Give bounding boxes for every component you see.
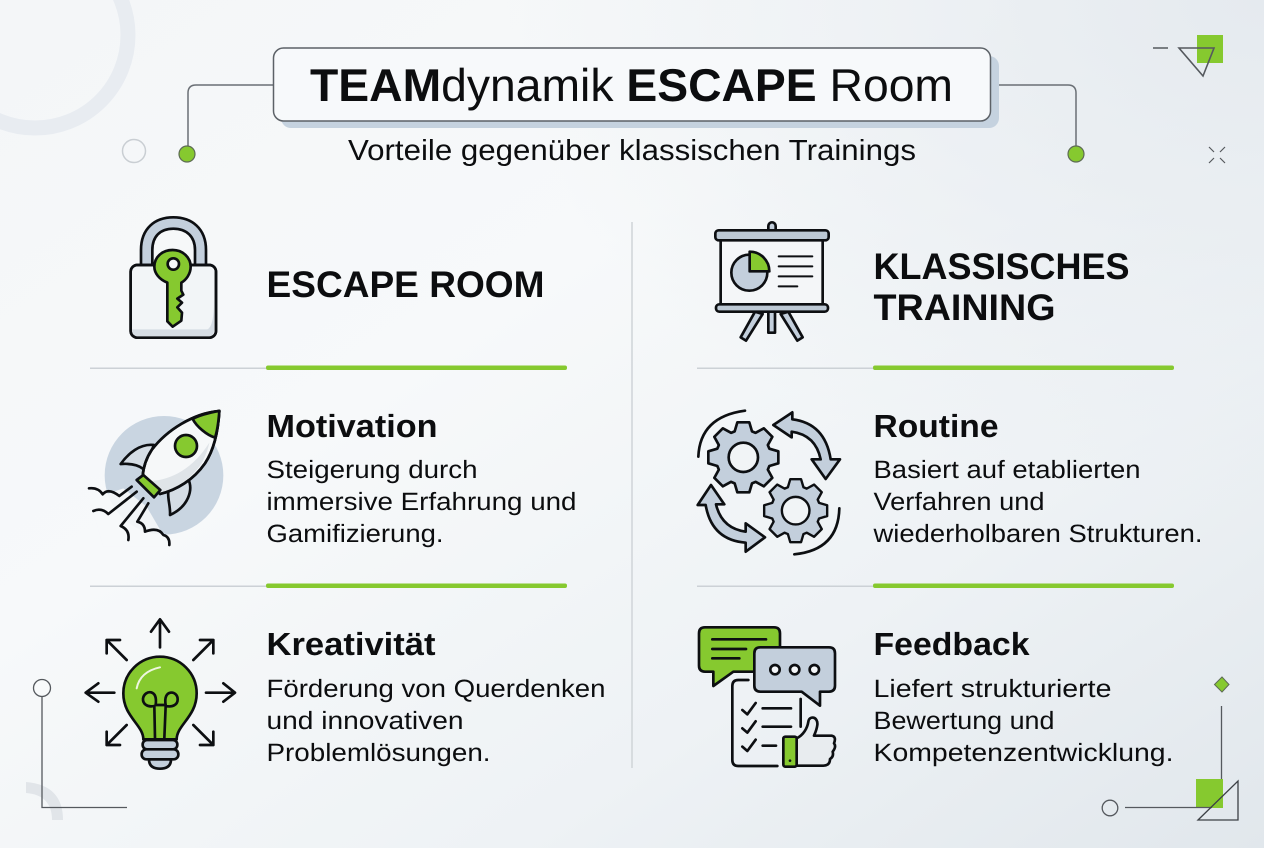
decoration: bottom-left bracket — [26, 680, 127, 820]
heading: Routine: Routine — [874, 408, 998, 444]
heading: Klassisches Training — [874, 246, 1130, 328]
heading: Klassisches Training: TRAINING — [874, 287, 1056, 328]
panel: Klassisches Training column — [697, 222, 1202, 767]
panel: Feedback — [699, 626, 1174, 767]
text: Motivation description — [266, 456, 576, 548]
text: Feedback description — [874, 675, 1174, 767]
center divider — [631, 222, 633, 768]
decoration: top-right shapes — [1153, 35, 1225, 163]
text: Motivation description: Steigerung durch — [266, 456, 478, 484]
title box — [274, 48, 999, 128]
title connector: right — [991, 85, 1084, 162]
panel: Kreativität — [86, 619, 605, 769]
text: Feedback description: Bewertung und — [874, 707, 1054, 735]
text: Feedback description: Liefert strukturierte — [874, 675, 1112, 703]
panel: Klassisches Training header — [715, 222, 1130, 341]
panel: Routine — [698, 408, 1202, 554]
text: Kreativität description — [266, 675, 606, 767]
panel: Escape Room column — [86, 217, 605, 769]
heading: Escape Room: ESCAPE ROOM — [266, 264, 544, 305]
text: Routine description: Verfahren und — [874, 488, 1044, 516]
heading: Feedback: Feedback — [874, 626, 1030, 662]
panel: Motivation — [89, 408, 576, 548]
text: Kreativität description: Problemlösungen. — [266, 739, 490, 767]
heading: Klassisches Training: KLASSISCHES — [874, 246, 1130, 287]
icon: presentation board — [715, 222, 829, 341]
decoration: top-left ring — [0, 0, 128, 128]
text: Feedback description: Kompetenzentwicklung. — [874, 739, 1174, 767]
decoration: bottom-right shapes — [1102, 677, 1238, 820]
decoration: top-left small circle — [122, 140, 146, 162]
text: Routine description — [872, 456, 1202, 548]
icon: light bulb with arrows — [86, 619, 235, 769]
heading: Kreativität: Kreativität — [266, 626, 436, 662]
icon: rocket — [89, 411, 223, 547]
icon: gears and cycle arrows — [698, 411, 840, 554]
heading: Motivation: Motivation — [266, 408, 438, 444]
text: Motivation description: Gamifizierung. — [266, 520, 444, 548]
divider: Motivation — [90, 584, 567, 588]
divider: Escape Room header — [90, 366, 567, 370]
divider: Klassisches Training header — [697, 366, 1174, 370]
icon: feedback bubbles, checklist and thumbs up — [699, 627, 835, 767]
text: Motivation description: immersive Erfahrung und — [266, 488, 576, 516]
subtitle: Vorteile gegenüber klassischen Trainings — [348, 135, 916, 167]
text: Kreativität description: und innovativen — [266, 707, 464, 735]
icon: padlock with key — [131, 217, 216, 338]
divider: Routine — [697, 584, 1174, 588]
text: Routine description: wiederholbaren Strukturen. — [872, 520, 1202, 548]
panel: Escape Room header — [131, 217, 544, 338]
title connector: left — [179, 85, 273, 162]
text: Routine description: Basiert auf etablierten — [874, 456, 1140, 484]
text: Kreativität description: Förderung von Querdenken — [266, 675, 606, 703]
title: TEAMdynamik ESCAPE Room — [310, 59, 953, 111]
